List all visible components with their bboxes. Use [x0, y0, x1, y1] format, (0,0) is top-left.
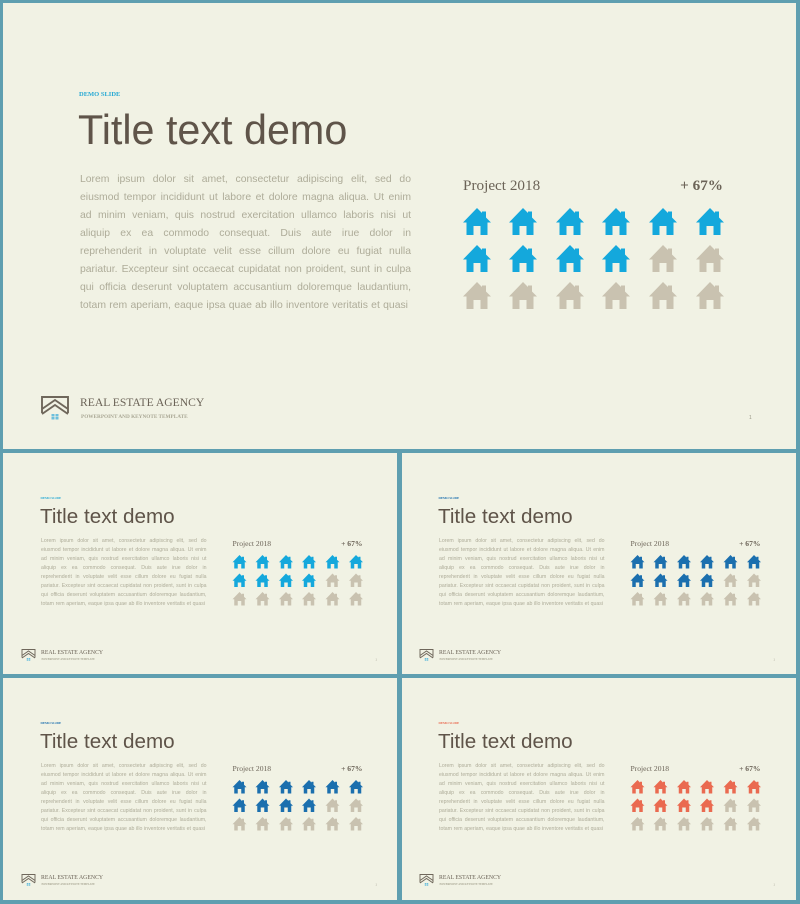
- chart label: project name: Project 2018: [232, 764, 271, 773]
- text block: body copy: [41, 763, 206, 832]
- text block: body copy: pariatur. Excepteur sint occaecat cupidatat non proident, sunt in culpa: [41, 808, 206, 814]
- text block: body copy: totam rem aperiam, eaque ipsa quae ab illo inventore veritatis et quasi: [41, 826, 205, 832]
- text block: body copy: [439, 538, 604, 606]
- text block: body copy: reprehenderit in voluptate velit esse cillum dolore eu fugiat nulla: [41, 574, 206, 580]
- text block: body copy: ad minim veniam, quis nostrud exercitation ullamco laboris nisi ut: [41, 556, 206, 562]
- logo: real estate agency: POWERPOINT AND KEYNOTE TEMPLATE: [42, 658, 95, 661]
- heading: title: Title text demo: [438, 504, 573, 528]
- label: demo slide: DEMO SLIDE: [438, 722, 459, 725]
- text block: body copy: reprehenderit in voluptate velit esse cillum dolore eu fugiat nulla: [439, 799, 604, 804]
- logo: real estate agency: [22, 649, 103, 661]
- text block: body copy: totam rem aperiam, eaque ipsa quae ab illo inventore veritatis et quasi: [439, 601, 603, 606]
- panel: coral variant: [402, 678, 796, 900]
- text block: body copy: ad minim veniam, quis nostrud exercitation ullamco laboris nisi ut: [80, 210, 411, 221]
- chart value: percentage: + 67%: [739, 540, 760, 548]
- heading: title: Title text demo: [438, 730, 573, 752]
- icons: house grid: [630, 555, 761, 606]
- text block: body copy: reprehenderit in voluptate velit esse cillum dolore eu fugiat nulla: [80, 246, 411, 257]
- text block: body copy: Lorem ipsum dolor sit amet, consectetur adipiscing elit, sed do: [439, 763, 604, 768]
- page number: 1: [749, 415, 752, 421]
- panel: dark blue variant, lower: [3, 678, 397, 900]
- chart value: percentage: + 67%: [680, 177, 723, 194]
- chart: house pictogram: [630, 540, 761, 606]
- text block: body copy: totam rem aperiam, eaque ipsa quae ab illo inventore veritatis et quasi: [41, 601, 205, 606]
- chart value: percentage: + 67%: [739, 764, 760, 773]
- heading: title: Title text demo: [40, 504, 175, 528]
- chart: house pictogram: [630, 764, 761, 830]
- text block: body copy: pariatur. Excepteur sint occaecat cupidatat non proident, sunt in culpa: [41, 583, 206, 588]
- panel: main slide: [3, 3, 796, 449]
- chart: house pictogram: [463, 177, 724, 309]
- logo: real estate agency: POWERPOINT AND KEYNOTE TEMPLATE: [42, 883, 95, 886]
- text block: body copy: pariatur. Excepteur sint occaecat cupidatat non proident, sunt in culpa: [439, 808, 604, 814]
- chart label: project name: Project 2018: [463, 177, 540, 194]
- label: demo slide: DEMO SLIDE: [79, 91, 120, 98]
- text block: body copy: qui officia deserunt voluptatem accusantium doloremque laudantium,: [41, 592, 206, 598]
- text block: body copy: ad minim veniam, quis nostrud exercitation ullamco laboris nisi ut: [439, 556, 604, 562]
- text block: body copy: aliquip ex ea commodo consequat. Duis aute irue dolor in: [80, 228, 411, 239]
- page number: 1: [774, 658, 775, 662]
- logo: real estate agency: REAL ESTATE AGENCY: [439, 874, 501, 880]
- logo: real estate agency: POWERPOINT AND KEYNOTE TEMPLATE: [440, 883, 493, 886]
- chart label: project name: Project 2018: [232, 540, 271, 548]
- logo: real estate agency: REAL ESTATE AGENCY: [439, 649, 501, 656]
- panel: dark blue variant: [402, 453, 796, 674]
- logo: real estate agency: REAL ESTATE AGENCY: [41, 649, 103, 656]
- text block: body copy: qui officia deserunt voluptatem accusantium doloremque laudantium,: [439, 592, 604, 598]
- label: demo slide: DEMO SLIDE: [40, 722, 61, 725]
- text block: body copy: eiusmod tempor incididunt ut labore et dolore magna aliqua. Ut enim: [41, 547, 206, 552]
- text block: body copy: qui officia deserunt voluptatem accusantium doloremque laudantium,: [80, 282, 411, 293]
- text block: body copy: aliquip ex ea commodo consequat. Duis aute irue dolor in: [439, 565, 604, 570]
- text block: body copy: aliquip ex ea commodo consequat. Duis aute irue dolor in: [41, 790, 206, 796]
- text block: body copy: Lorem ipsum dolor sit amet, consectetur adipiscing elit, sed do: [41, 538, 206, 544]
- label: demo slide: DEMO SLIDE: [438, 496, 459, 500]
- icons: house grid: [232, 780, 363, 830]
- chart label: project name: Project 2018: [630, 764, 669, 773]
- logo: real estate agency: [41, 396, 204, 420]
- text block: body copy: pariatur. Excepteur sint occaecat cupidatat non proident, sunt in culpa: [80, 264, 411, 275]
- text block: body copy: ad minim veniam, quis nostrud exercitation ullamco laboris nisi ut: [41, 781, 206, 786]
- chart label: project name: Project 2018: [630, 540, 669, 548]
- logo: real estate agency: [420, 649, 501, 661]
- heading: title: Title text demo: [40, 730, 175, 752]
- text block: body copy: [439, 763, 604, 832]
- icons: house grid: [630, 780, 761, 830]
- logo: real estate agency: REAL ESTATE AGENCY: [41, 874, 103, 880]
- text block: body copy: [41, 538, 206, 606]
- logo: real estate agency: [420, 874, 501, 886]
- chart: house pictogram: [232, 540, 363, 606]
- label: demo slide: DEMO SLIDE: [40, 496, 61, 500]
- page number: 1: [376, 658, 377, 662]
- text block: body copy: ad minim veniam, quis nostrud exercitation ullamco laboris nisi ut: [439, 781, 604, 786]
- text block: body copy: totam rem aperiam, eaque ipsa quae ab illo inventore veritatis et quasi: [439, 826, 603, 832]
- text block: body copy: aliquip ex ea commodo consequat. Duis aute irue dolor in: [439, 790, 604, 796]
- text block: body copy: eiusmod tempor incididunt ut labore et dolore magna aliqua. Ut enim: [41, 772, 206, 778]
- text block: body copy: eiusmod tempor incididunt ut labore et dolore magna aliqua. Ut enim: [80, 192, 411, 203]
- text block: body copy: reprehenderit in voluptate velit esse cillum dolore eu fugiat nulla: [439, 574, 604, 580]
- text block: body copy: Lorem ipsum dolor sit amet, consectetur adipiscing elit, sed do: [41, 763, 206, 768]
- text block: body copy: Lorem ipsum dolor sit amet, consectetur adipiscing elit, sed do: [80, 174, 411, 185]
- icons: house grid: [463, 208, 724, 309]
- text block: body copy: Lorem ipsum dolor sit amet, consectetur adipiscing elit, sed do: [439, 538, 604, 544]
- text block: body copy: pariatur. Excepteur sint occaecat cupidatat non proident, sunt in culpa: [439, 583, 604, 588]
- text block: body copy: [80, 174, 411, 311]
- logo: real estate agency: REAL ESTATE AGENCY: [80, 396, 204, 409]
- chart: house pictogram: [232, 764, 363, 830]
- page number: 1: [774, 884, 775, 886]
- text block: body copy: eiusmod tempor incididunt ut labore et dolore magna aliqua. Ut enim: [439, 772, 604, 778]
- page number: 1: [376, 884, 377, 886]
- logo: real estate agency: POWERPOINT AND KEYNOTE TEMPLATE: [440, 658, 493, 661]
- chart value: percentage: + 67%: [341, 764, 362, 773]
- logo: real estate agency: POWERPOINT AND KEYNOTE TEMPLATE: [81, 414, 188, 420]
- text block: body copy: eiusmod tempor incididunt ut labore et dolore magna aliqua. Ut enim: [439, 547, 604, 552]
- icons: house grid: [232, 555, 363, 606]
- logo: real estate agency: [22, 874, 103, 886]
- text block: body copy: totam rem aperiam, eaque ipsa quae ab illo inventore veritatis et quasi: [80, 300, 408, 311]
- text block: body copy: qui officia deserunt voluptatem accusantium doloremque laudantium,: [41, 817, 206, 822]
- heading: title: Title text demo: [78, 107, 347, 153]
- text block: body copy: qui officia deserunt voluptatem accusantium doloremque laudantium,: [439, 817, 604, 822]
- panel: bright blue variant: [3, 453, 397, 674]
- text block: body copy: reprehenderit in voluptate velit esse cillum dolore eu fugiat nulla: [41, 799, 206, 804]
- text block: body copy: aliquip ex ea commodo consequat. Duis aute irue dolor in: [41, 565, 206, 570]
- chart value: percentage: + 67%: [341, 540, 362, 548]
